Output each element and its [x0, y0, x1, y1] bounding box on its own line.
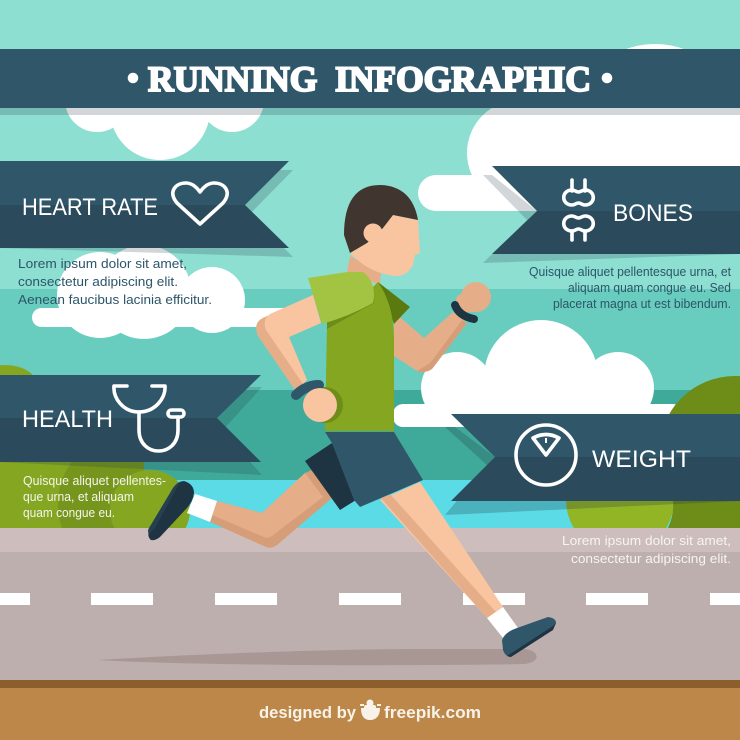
text: bones description: Quisque aliquet pellentesque urna, et: [529, 265, 731, 279]
text: health description: Quisque aliquet pellentes-: [23, 474, 166, 488]
runner: [148, 185, 556, 657]
shorts: [305, 432, 423, 510]
panel: heart rate: [0, 161, 293, 307]
neck and head: [344, 185, 420, 285]
background: sky and sea: [0, 0, 740, 529]
footer credit: [259, 700, 481, 722]
front leg: [380, 482, 556, 657]
icon: stethoscope: [114, 386, 184, 451]
runner ground shadow: [97, 649, 537, 665]
cloud: top left: [65, 60, 264, 160]
text: health description: quam congue eu.: [23, 506, 115, 520]
shirt: [325, 282, 410, 431]
road and ground: [0, 528, 740, 740]
text: weight description: consectetur adipiscing elit.: [571, 552, 731, 566]
title banner: [0, 49, 740, 115]
front arm: [256, 295, 343, 423]
text: health description: que urna, et aliquam: [23, 490, 134, 504]
road centre dashes: [0, 593, 740, 605]
heading: weight: WEIGHT: [592, 446, 691, 473]
text: heart rate description: Aenean faucibus lacinia efficitur.: [18, 293, 212, 307]
panel: bones: [483, 166, 740, 311]
heading: bones: BONES: [613, 200, 693, 227]
heading: health: HEALTH: [22, 406, 113, 433]
cloud: middle right: [393, 320, 683, 434]
cloud: middle left: [32, 245, 302, 339]
back arm: [394, 282, 491, 372]
text: weight description: Lorem ipsum dolor sit amet,: [562, 534, 731, 548]
icon: weight scale: [516, 425, 576, 485]
left bushes: [0, 365, 190, 550]
icon: freepik logo: [360, 700, 381, 720]
back leg: [148, 470, 332, 548]
text: bones description: placerat magna ut est bibendum.: [553, 297, 731, 311]
heading: heart rate: HEART RATE: [22, 194, 158, 221]
footer credit: freepik.com: [384, 703, 481, 722]
panel: weight: [445, 414, 740, 566]
cloud: top right: [418, 44, 740, 216]
footer credit: designed by: [259, 703, 357, 722]
right bushes: [566, 376, 740, 554]
text: heart rate description: consectetur adipiscing elit.: [18, 275, 178, 289]
icon: heart: [173, 183, 227, 224]
panel: health: [0, 375, 262, 520]
text: heart rate description: Lorem ipsum dolor sit amet,: [18, 257, 187, 271]
icon: bones: [564, 180, 593, 240]
sleeve: [308, 272, 374, 324]
title text: RUNNING INFOGRAPHIC: [148, 59, 591, 99]
text: bones description: aliquam quam congue eu. Sed: [568, 281, 731, 295]
